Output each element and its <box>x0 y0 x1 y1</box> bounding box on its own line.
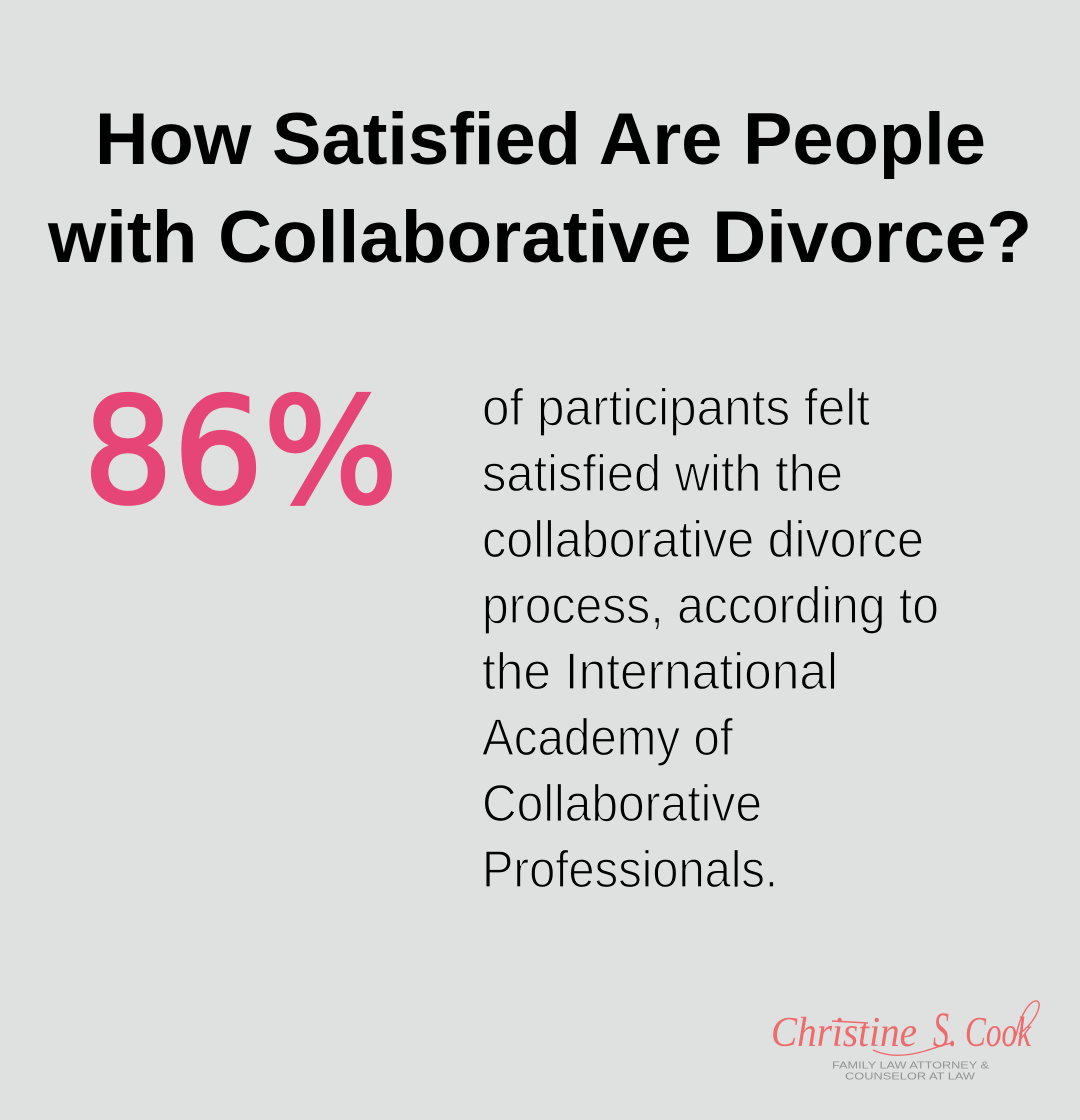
description text: process, according to <box>482 577 939 635</box>
logo tagline <box>832 1060 989 1082</box>
logo: Christine S. Cook <box>771 1001 1039 1082</box>
description text: collaborative divorce <box>482 511 924 569</box>
logo tagline: COUNSELOR AT LAW <box>845 1070 975 1082</box>
description text <box>482 379 939 899</box>
logo signature: S. <box>933 1001 957 1057</box>
logo signature <box>771 1001 1032 1057</box>
description text: Academy of <box>482 709 734 767</box>
title: with Collaborative Divorce? <box>47 197 1032 278</box>
description text: satisfied with the <box>482 445 843 503</box>
logo tagline: FAMILY LAW ATTORNEY & <box>832 1060 989 1072</box>
description text: the International <box>482 643 838 701</box>
logo signature: Christine <box>771 1010 917 1056</box>
big statistic: 86%: 86% <box>83 367 398 537</box>
description text: of participants felt <box>482 379 871 437</box>
title <box>47 99 1032 278</box>
logo swash <box>832 1001 1039 1055</box>
logo signature: Cook <box>965 1010 1032 1056</box>
description text: Professionals. <box>482 841 778 899</box>
title: How Satisfied Are People <box>95 99 986 180</box>
description text: Collaborative <box>482 775 762 833</box>
